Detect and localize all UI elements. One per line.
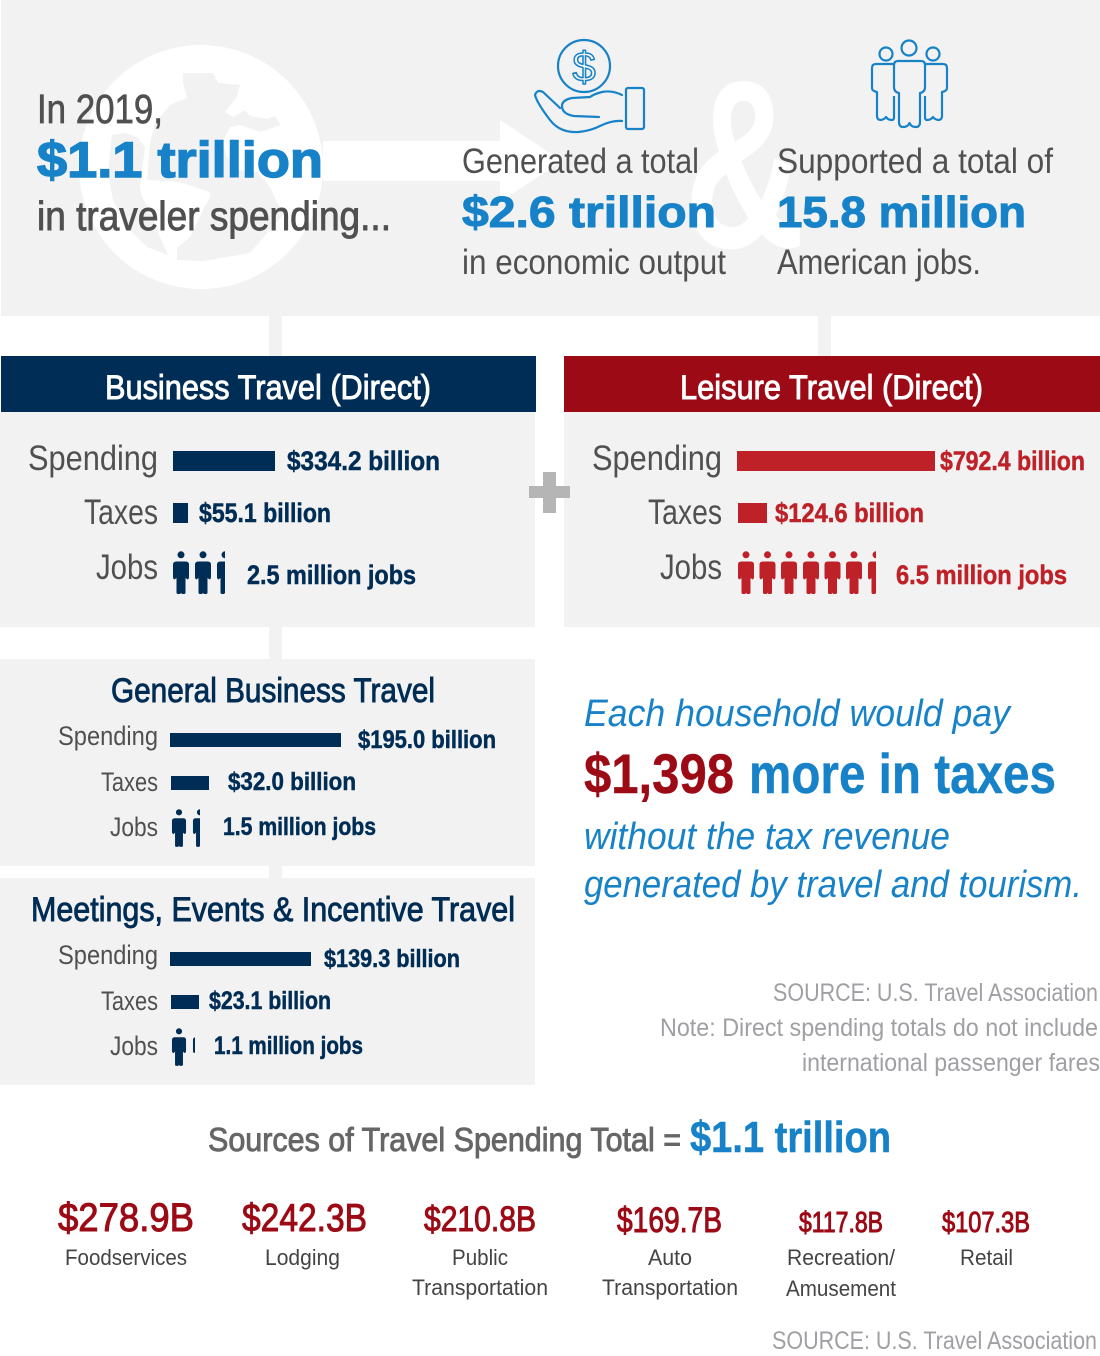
row: taxes <box>84 493 331 532</box>
row: jobs: 6.5 million jobs <box>896 560 1067 590</box>
row: jobs: 2.5 million jobs <box>247 560 416 590</box>
row: jobs <box>110 1028 363 1066</box>
panel: top summary <box>1 0 1100 316</box>
text: in 2019: In 2019, <box>37 86 163 132</box>
heading: leisure travel: Leisure Travel (Direct) <box>680 369 983 407</box>
source note <box>660 979 1100 1077</box>
row: spending <box>58 940 460 973</box>
icon: group of people <box>872 40 947 127</box>
stat: foodservices <box>58 1196 194 1270</box>
stat: recreation and amusement <box>786 1207 896 1301</box>
icon: globe <box>79 45 323 289</box>
stat: auto transportation <box>602 1201 738 1300</box>
callout: household taxes: Each household would pay <box>584 693 1012 735</box>
row: taxes: $23.1 billion <box>209 987 331 1015</box>
row: jobs <box>110 809 376 847</box>
heading: business travel: Business Travel (Direct) <box>105 369 431 407</box>
text: american jobs <box>777 142 1053 282</box>
connector: between sub-panels <box>269 866 282 878</box>
text: in 2019: in traveler spending... <box>37 193 391 239</box>
connector: right top <box>818 316 831 356</box>
icon: hand with coin: $ <box>572 43 596 90</box>
stat: public transportation <box>412 1200 548 1300</box>
row: jobs <box>96 548 416 594</box>
panel: leisure travel <box>564 356 1100 627</box>
stat: retail: Retail <box>960 1245 1013 1270</box>
text: economic output: in economic output <box>462 243 726 282</box>
stat: public transportation: Public <box>452 1245 508 1270</box>
heading: business travel <box>1 356 536 412</box>
row: spending <box>592 439 1085 478</box>
heading: sources of travel spending <box>208 1113 891 1162</box>
row: jobs: Jobs <box>660 548 722 587</box>
row: taxes: Taxes <box>101 986 158 1016</box>
stat: lodging: $242.3B <box>242 1197 367 1240</box>
stat: auto transportation: Auto <box>648 1245 692 1270</box>
icon: plus <box>529 472 570 513</box>
heading: meetings, events and incentive travel: Meetings, Events & Incentive Travel <box>31 891 515 929</box>
panel: business travel <box>0 356 536 627</box>
row: taxes <box>648 493 924 532</box>
stat: recreation and amusement: Recreation/ <box>787 1245 896 1270</box>
row: taxes: $32.0 billion <box>228 768 356 796</box>
row: taxes <box>101 767 356 797</box>
stat: lodging <box>242 1197 367 1270</box>
stat: public transportation: $210.8B <box>424 1200 536 1239</box>
text: economic output <box>462 142 726 282</box>
row: spending: Spending <box>28 439 158 478</box>
stat: lodging: Lodging <box>265 1245 340 1270</box>
stat: recreation and amusement: Amusement <box>786 1276 896 1301</box>
row: jobs: Jobs <box>110 1031 158 1061</box>
stat: retail: $107.3B <box>942 1207 1030 1239</box>
heading: general business travel: General Business Travel <box>111 672 435 710</box>
text: in 2019: $1.1 trillion <box>37 132 323 188</box>
row: taxes: Taxes <box>101 767 158 797</box>
text: economic output: Generated a total <box>462 142 699 181</box>
stat: public transportation: Transportation <box>412 1275 548 1300</box>
row: taxes: $55.1 billion <box>199 498 331 528</box>
panel: meetings, events and incentive travel <box>0 878 535 1085</box>
text: american jobs: Supported a total of <box>777 142 1053 181</box>
stat: auto transportation: $169.7B <box>617 1201 722 1240</box>
callout: household taxes <box>584 693 1082 906</box>
text: american jobs: American jobs. <box>777 243 981 282</box>
row: spending <box>28 439 440 478</box>
row: jobs <box>660 548 1067 594</box>
arrow: spending to output <box>323 120 562 202</box>
row: spending: Spending <box>58 940 158 970</box>
panel: general business travel <box>0 659 535 866</box>
connector: left top <box>269 316 282 356</box>
row: taxes: Taxes <box>84 493 158 532</box>
row: jobs: 1.5 million jobs <box>223 813 376 841</box>
icon: hand with coin <box>535 40 644 132</box>
row: spending: $195.0 billion <box>358 726 496 754</box>
stat: recreation and amusement: $117.8B <box>799 1207 883 1239</box>
ampersand: & <box>684 30 805 298</box>
row: jobs: Jobs <box>96 548 158 587</box>
row: spending: $139.3 billion <box>324 945 460 973</box>
stat: retail <box>942 1207 1030 1270</box>
heading: leisure travel <box>564 356 1100 412</box>
stat: auto transportation: Transportation <box>602 1275 738 1300</box>
heading: sources of travel spending: Sources of Travel Spending Total = <box>208 1121 681 1158</box>
text: american jobs: 15.8 million <box>777 188 1026 237</box>
callout: household taxes: without the tax revenue <box>584 816 950 858</box>
text: economic output: $2.6 trillion <box>462 188 716 237</box>
connector: business to sub-panels <box>269 627 282 659</box>
row: jobs: 1.1 million jobs <box>214 1032 363 1060</box>
stat: foodservices: $278.9B <box>58 1196 194 1240</box>
row: taxes <box>101 986 331 1016</box>
row: spending: $334.2 billion <box>287 446 440 476</box>
row: jobs: Jobs <box>110 812 158 842</box>
row: taxes: $124.6 billion <box>775 498 924 528</box>
stat: foodservices: Foodservices <box>65 1245 187 1270</box>
text: in 2019 <box>37 86 391 239</box>
callout: household taxes: more in taxes <box>749 742 1056 805</box>
heading: sources of travel spending: $1.1 trillion <box>690 1113 891 1162</box>
callout: household taxes: $1,398 <box>584 742 734 805</box>
row: spending: Spending <box>592 439 722 478</box>
row: spending <box>58 721 496 754</box>
row: taxes: Taxes <box>648 493 722 532</box>
row: spending: Spending <box>58 721 158 751</box>
